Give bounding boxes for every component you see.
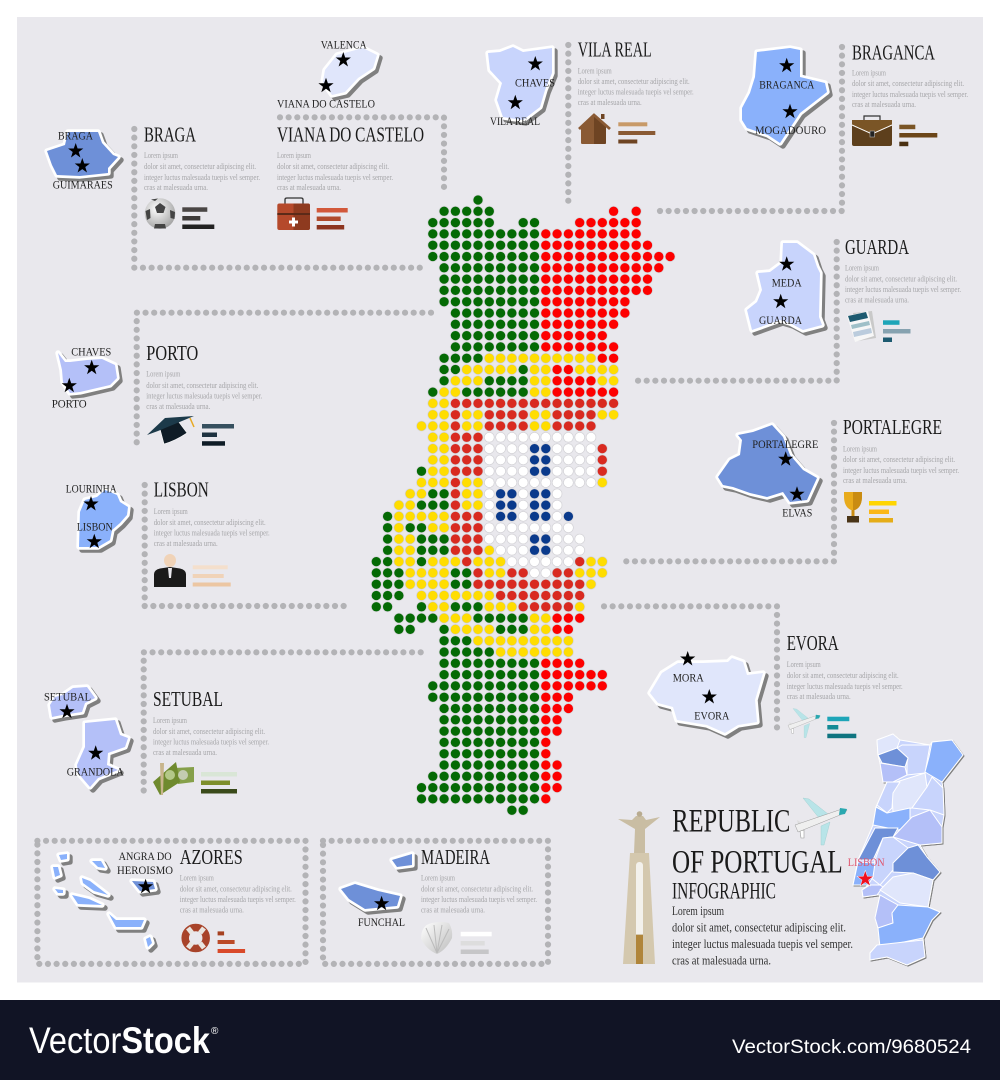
map: azores islands [53, 854, 155, 947]
panel: braga [47, 123, 420, 268]
text block: viana [277, 150, 393, 192]
city label: vila real: VILA REAL [490, 114, 540, 128]
icon: banknotes [153, 762, 194, 795]
text block: evora: integer luctus malesuada tuepis vel semper. [787, 681, 903, 691]
city label: mogadouro: MOGADOURO [755, 123, 826, 137]
text block: portalegre: dolor sit amet, consectetur adipiscing elit. [843, 454, 955, 464]
panel: lisbon [66, 478, 352, 606]
text block: porto [146, 369, 262, 411]
bars: azores [218, 931, 245, 953]
city label: meda: MEDA [772, 276, 802, 290]
footer band [0, 1000, 1000, 1080]
bars: braga [182, 207, 214, 229]
icon: trophy [844, 492, 862, 522]
text block: portalegre: integer luctus malesuada tuepis vel semper. [843, 465, 959, 475]
city label: braganca: BRAGANCA [759, 77, 815, 91]
text block: madeira: integer luctus malesuada tuepis vel semper. [421, 894, 537, 904]
city label: elvas: ELVAS [782, 506, 812, 520]
panel: porto [52, 313, 431, 446]
heading: azores: AZORES [180, 845, 243, 869]
city label: braga: BRAGA [58, 128, 93, 142]
icon: soccer ball [145, 198, 175, 229]
stars: viana [318, 52, 351, 92]
text block: guarda: integer luctus malesuada tuepis vel semper. [845, 284, 961, 294]
stars: evora [680, 651, 717, 704]
text block: braganca [852, 67, 968, 109]
heading: setubal: SETUBAL [153, 687, 223, 711]
city label: lisbon: LISBON [77, 520, 113, 534]
text block: viana: integer luctus malesuada tuepis vel semper. [277, 172, 393, 182]
text block: vila real: dolor sit amet, consectetur adipiscing elit. [578, 76, 690, 86]
heading: viana do castelo: VIANA DO CASTELO [277, 123, 424, 147]
city label: grandola: GRANDOLA [67, 765, 124, 779]
icon: businessman [154, 554, 186, 587]
city label: setubal: SETUBAL [44, 690, 91, 704]
text block: braganca: dolor sit amet, consectetur adipiscing elit. [852, 78, 964, 88]
panel: viana do castelo [277, 37, 444, 230]
stars: setubal [59, 704, 103, 760]
text block: guarda [845, 263, 961, 304]
text block: setubal: cras at malesuada urna. [153, 747, 217, 757]
panel: portalegre [626, 415, 959, 561]
text block: vila real [578, 65, 694, 107]
text block: intro [672, 903, 853, 967]
star: lisbon [858, 871, 873, 886]
icon: airplane [788, 708, 820, 738]
text block: braga [144, 150, 260, 192]
map: madeira islands [341, 854, 412, 909]
bars: porto [202, 424, 234, 446]
text block: lisbon: Lorem ipsum [154, 506, 188, 516]
text block: evora: dolor sit amet, consectetur adipiscing elit. [787, 670, 899, 680]
text block: azores [180, 873, 296, 914]
title: republic: REPUBLIC [672, 804, 790, 840]
text block: setubal: integer luctus malesuada tuepis vel semper. [153, 736, 269, 746]
city label: chaves: CHAVES [71, 345, 111, 359]
stars: vila real [508, 56, 543, 109]
heading: porto: PORTO [146, 341, 198, 365]
text block: portalegre: cras at malesuada urna. [843, 475, 907, 485]
text block: braga: Lorem ipsum [144, 150, 178, 160]
map: portalegre [718, 425, 817, 502]
heading: portalegre: PORTALEGRE [843, 415, 942, 439]
bars: guarda [883, 320, 910, 342]
stars: portalegre [778, 451, 805, 501]
text block: vila real: integer luctus malesuada tuepis vel semper. [578, 87, 694, 97]
text block: porto: Lorem ipsum [146, 369, 181, 379]
text block: lisbon [154, 506, 270, 548]
text block: portalegre [843, 443, 959, 485]
text block: evora: Lorem ipsum [787, 659, 821, 669]
city label: chaves: CHAVES [515, 76, 555, 90]
map: braga [47, 132, 118, 176]
text block: braganca: cras at malesuada urna. [852, 99, 916, 109]
text block: setubal: dolor sit amet, consectetur adipiscing elit. [153, 726, 265, 736]
city label: evora: EVORA [694, 708, 730, 722]
text block: intro: dolor sit amet, consectetur adipiscing elit. [672, 920, 846, 935]
stars: porto [62, 360, 99, 392]
footer logo: VectorStock [29, 1020, 210, 1061]
panel: madeira [323, 841, 548, 964]
heading: evora: EVORA [787, 631, 839, 655]
city label: funchal: FUNCHAL [358, 915, 405, 929]
text block: lisbon: integer luctus malesuada tuepis vel semper. [154, 528, 270, 538]
bars: setubal [201, 772, 237, 794]
icon: lifebuoy [185, 928, 206, 948]
text block: guarda: dolor sit amet, consectetur adipiscing elit. [845, 274, 957, 284]
map: viana do castelo [323, 48, 377, 95]
icon: graduation cap [147, 416, 194, 444]
stars: braga [68, 143, 90, 172]
text block: intro: Lorem ipsum [672, 903, 724, 918]
bars: evora [827, 717, 856, 738]
text block: viana: Lorem ipsum [277, 150, 311, 160]
subtitle: infographic: INFOGRAPHIC [672, 878, 776, 903]
text block: azores: Lorem ipsum [180, 873, 214, 883]
map: evora [650, 658, 763, 733]
text block: madeira [421, 873, 537, 914]
text block: lisbon: dolor sit amet, consectetur adipiscing elit. [154, 517, 266, 527]
icon: newspaper [847, 311, 876, 342]
panel: braganca [660, 40, 968, 211]
text block: evora [787, 659, 903, 701]
text block: portalegre: Lorem ipsum [843, 443, 877, 453]
icon: house [579, 114, 610, 144]
text block: evora: cras at malesuada urna. [787, 691, 851, 701]
city label: angra do heroismo: ANGRA DO [119, 849, 172, 863]
icon: airplane [795, 798, 847, 845]
heading: madeira: MADEIRA [421, 845, 491, 869]
central dotted flag map of Portugal [376, 200, 670, 810]
map: portugal regions [853, 734, 963, 965]
map: setubal [50, 687, 128, 787]
bars: madeira [461, 932, 492, 954]
text block: madeira: Lorem ipsum [421, 873, 455, 883]
text block: azores: dolor sit amet, consectetur adipiscing elit. [180, 884, 292, 894]
bars: lisbon [193, 565, 231, 586]
text block: braga: integer luctus malesuada tuepis vel semper. [144, 172, 260, 182]
heading: braganca: BRAGANCA [852, 40, 936, 64]
panel: guarda [638, 235, 961, 381]
panel: azores [37, 841, 306, 964]
text block: setubal: Lorem ipsum [153, 715, 187, 725]
text block: guarda: Lorem ipsum [845, 263, 879, 273]
footer registered mark: ® [211, 1026, 219, 1037]
text block: madeira: dolor sit amet, consectetur adipiscing elit. [421, 884, 533, 894]
text block: viana: dolor sit amet, consectetur adipiscing elit. [277, 161, 389, 171]
stars: braganca [779, 58, 798, 118]
text block: intro: integer luctus malesuada tuepis vel semper. [672, 936, 853, 951]
panel: title block [618, 734, 963, 967]
stars: lisbon [83, 496, 102, 548]
bars: braganca [899, 125, 937, 146]
bars: portalegre [869, 501, 896, 522]
icon: scallop shell [421, 922, 452, 954]
city label: mora: MORA [673, 671, 704, 685]
text block: madeira: cras at malesuada urna. [421, 904, 485, 914]
city label: angra do heroismo [117, 849, 173, 877]
city label: guimaraes: GUIMARAES [53, 177, 113, 191]
panel: evora [604, 606, 903, 738]
city label: angra do heroismo: HEROISMO [117, 863, 173, 877]
footer url: VectorStock.com/9680524 [732, 1037, 971, 1058]
map: porto [58, 353, 117, 393]
text block: lisbon: cras at malesuada urna. [154, 538, 218, 548]
city label: valenca: VALENCA [321, 37, 367, 51]
icon: cristo rei statue [618, 811, 660, 964]
star: madeira [374, 896, 389, 910]
stars: guarda [773, 256, 794, 308]
icon: first aid case [277, 198, 310, 230]
text block: vila real: cras at malesuada urna. [578, 97, 642, 107]
text block: braga: dolor sit amet, consectetur adipiscing elit. [144, 161, 256, 171]
heading: lisbon: LISBON [154, 478, 209, 502]
heading: braga: BRAGA [144, 123, 197, 147]
text block: azores: cras at malesuada urna. [180, 904, 244, 914]
city label: lourinha: LOURINHA [66, 482, 117, 496]
text block: vila real: Lorem ipsum [578, 65, 612, 75]
text block: braga: cras at malesuada urna. [144, 182, 208, 192]
panel: vila real [488, 38, 694, 209]
panel: setubal [44, 652, 421, 795]
text block: guarda: cras at malesuada urna. [845, 294, 909, 304]
text block: braganca: integer luctus malesuada tuepis vel semper. [852, 89, 968, 99]
text block: porto: integer luctus malesuada tuepis vel semper. [146, 390, 262, 400]
map: lisbon [79, 490, 128, 547]
text block: braganca: Lorem ipsum [852, 67, 886, 77]
heading: guarda: GUARDA [845, 235, 910, 259]
text block: azores: integer luctus malesuada tuepis vel semper. [180, 894, 296, 904]
text block: intro: cras at malesuada urna. [672, 952, 771, 967]
bars: vila real [618, 122, 655, 144]
city label: lisbon: LISBON [848, 855, 885, 869]
star: azores [138, 879, 153, 893]
text block: porto: dolor sit amet, consectetur adipiscing elit. [146, 380, 258, 390]
map: vila real [488, 47, 552, 120]
title: of portugal: OF PORTUGAL [672, 845, 843, 881]
bars: viana [317, 208, 348, 230]
city label: guarda: GUARDA [759, 313, 802, 327]
text block: setubal [153, 715, 269, 757]
text block: porto: cras at malesuada urna. [146, 401, 210, 411]
heading: vila real: VILA REAL [578, 38, 652, 62]
icon: briefcase [852, 116, 892, 146]
city label: portalegre: PORTALEGRE [752, 437, 818, 451]
map: braganca [742, 48, 827, 143]
city label: porto: PORTO [52, 397, 87, 411]
city label: viana do castelo: VIANA DO CASTELO [277, 97, 375, 111]
map: guarda [747, 243, 822, 330]
text block: viana: cras at malesuada urna. [277, 182, 341, 192]
